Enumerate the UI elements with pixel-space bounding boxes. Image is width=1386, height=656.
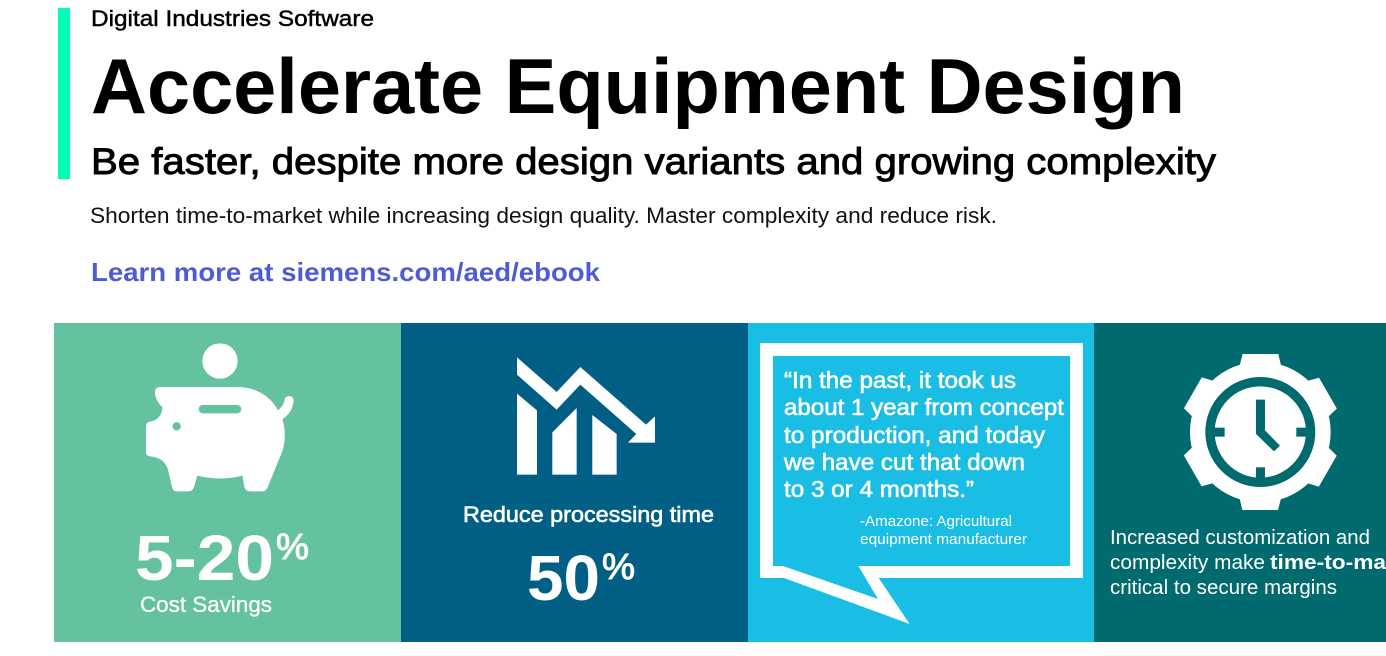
stat: 50%: 50 [527, 542, 600, 614]
title: Accelerate Equipment Design [91, 42, 1185, 130]
link: Learn more at siemens.com/aed/ebook [91, 257, 601, 287]
body text: complexity make [1110, 552, 1265, 574]
stat label: Reduce processing time [463, 502, 714, 527]
icon: piggy bank [146, 343, 294, 491]
subtitle: Be faster, despite more design variants and growing complexity [91, 141, 1217, 182]
body text [1110, 527, 1386, 599]
stat: 50% [527, 542, 635, 614]
speech bubble [760, 343, 1083, 624]
body text: Increased customization and [1110, 527, 1370, 549]
body text: time-to-ma [1270, 552, 1386, 574]
panel: time-to-market [1094, 323, 1386, 642]
quote text: about 1 year from concept [784, 394, 1065, 420]
quote attribution: equipment manufacturer [860, 531, 1027, 548]
quote text: we have cut that down [783, 449, 1025, 475]
icon: gear with clock [1182, 354, 1339, 510]
panel: cost savings [54, 323, 401, 642]
panel: processing time [401, 323, 748, 642]
header label: Digital Industries Software [91, 6, 374, 31]
quote attribution [860, 513, 1027, 548]
quote text [783, 367, 1065, 502]
quote text: “In the past, it took us [784, 367, 1016, 393]
stat: 50%: % [602, 546, 635, 587]
panel: customer quote [748, 323, 1094, 642]
quote text: to production, and today [784, 422, 1046, 448]
stat label: Cost Savings [140, 592, 272, 617]
quote text: to 3 or 4 months.” [784, 476, 974, 502]
description: Shorten time-to-market while increasing design quality. Master complexity and reduce risk. [90, 203, 997, 228]
accent bar [58, 8, 70, 179]
stat: 5-20%: 5-20 [135, 522, 274, 594]
body text: critical to secure margins [1110, 577, 1337, 599]
stat: 5-20%: % [276, 526, 309, 567]
icon: declining chart [517, 357, 655, 475]
quote attribution: -Amazone: Agricultural [860, 513, 1012, 530]
